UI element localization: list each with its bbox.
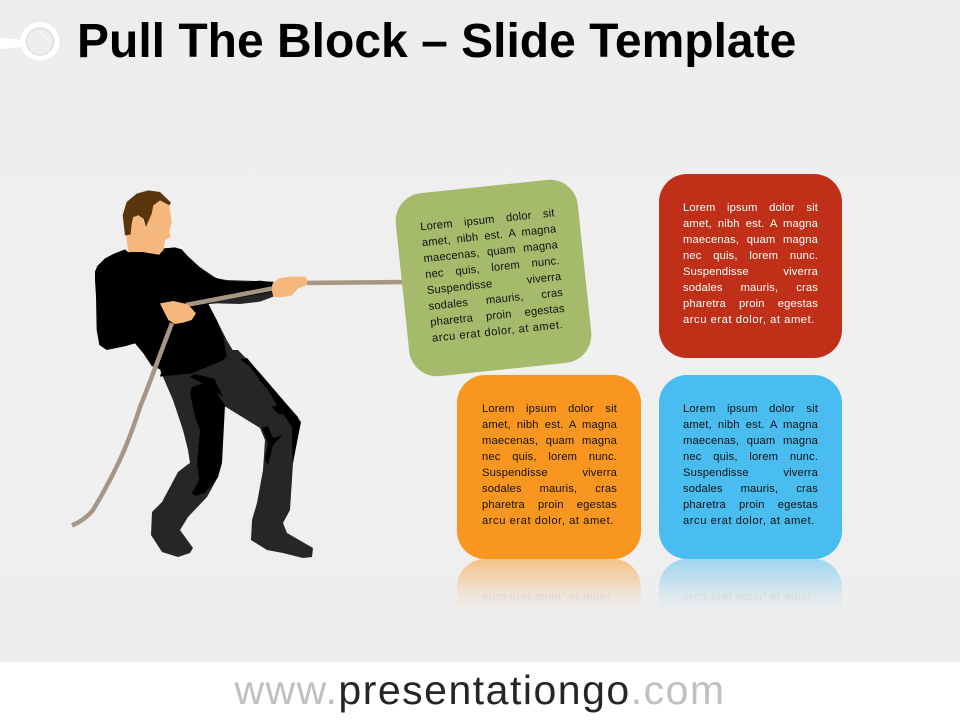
panel: orange block (457, 375, 641, 559)
panel: orange block: Lorem ipsum dolor sit (482, 403, 617, 415)
panel: red block (659, 174, 842, 358)
panel: blue block: sodales mauris, cras (683, 483, 818, 495)
panel: orange block: amet, nibh est. A magna (482, 419, 617, 431)
panel: blue block: nec quis, lorem nunc. (683, 451, 818, 463)
reflection: blue block: arcu erat dolor, at amet. (683, 591, 815, 603)
panel: green tilted block: sodales mauris, cras (428, 287, 564, 313)
panel: blue block: Lorem ipsum dolor sit (683, 403, 818, 415)
panel: red block: nec quis, lorem nunc. (683, 250, 818, 262)
head (123, 190, 172, 255)
panel: orange block: Suspendisse viverra (482, 467, 617, 479)
panel: blue block: Suspendisse viverra (683, 467, 818, 479)
legs (151, 350, 313, 558)
panel: red block: pharetra proin egestas (683, 298, 818, 310)
panel: blue block: amet, nibh est. A magna (683, 419, 818, 431)
panel: red block: Suspendisse viverra (683, 266, 818, 278)
panel: green tilted block: maecenas, quam magna (423, 239, 559, 265)
panel: orange block: sodales mauris, cras (482, 483, 617, 495)
panel: red block: amet, nibh est. A magna (683, 218, 818, 230)
panel: green tilted block (393, 177, 594, 379)
panel: orange block: nec quis, lorem nunc. (482, 451, 617, 463)
panel: blue block: maecenas, quam magna (683, 435, 818, 447)
panel: green tilted block: amet, nibh est. A magna (421, 223, 557, 249)
panel: orange block: arcu erat dolor, at amet. (482, 515, 614, 527)
hair (123, 190, 171, 235)
icon: ring and pull line (0, 22, 60, 61)
panel: red block: maecenas, quam magna (683, 234, 818, 246)
panel: green tilted block: Suspendisse viverra (426, 271, 562, 297)
panel: red block: Lorem ipsum dolor sit (683, 202, 818, 214)
panel: orange block: pharetra proin egestas (482, 499, 617, 511)
title: Pull The Block – Slide Template (77, 15, 796, 68)
panel: red block: sodales mauris, cras (683, 282, 818, 294)
panel: green tilted block: nec quis, lorem nunc. (425, 255, 560, 281)
reflection: orange block: arcu erat dolor, at amet. (482, 591, 614, 603)
reflection: blue block (659, 559, 842, 604)
panel: green tilted block: pharetra proin egestas (430, 303, 565, 329)
panel: green tilted block: arcu erat dolor, at amet. (431, 319, 564, 345)
panel: blue block: arcu erat dolor, at amet. (683, 515, 815, 527)
reflection: orange block (457, 559, 641, 604)
footer website address: www.presentationgo.com (234, 667, 726, 713)
panel: blue block (659, 375, 842, 559)
hands (160, 277, 307, 324)
panel: orange block: maecenas, quam magna (482, 435, 617, 447)
panel: blue block: pharetra proin egestas (683, 499, 818, 511)
rope (72, 282, 403, 526)
panel: green tilted block: Lorem ipsum dolor sit (420, 207, 555, 233)
torso and arms (95, 247, 273, 380)
panel: red block: arcu erat dolor, at amet. (683, 314, 815, 326)
